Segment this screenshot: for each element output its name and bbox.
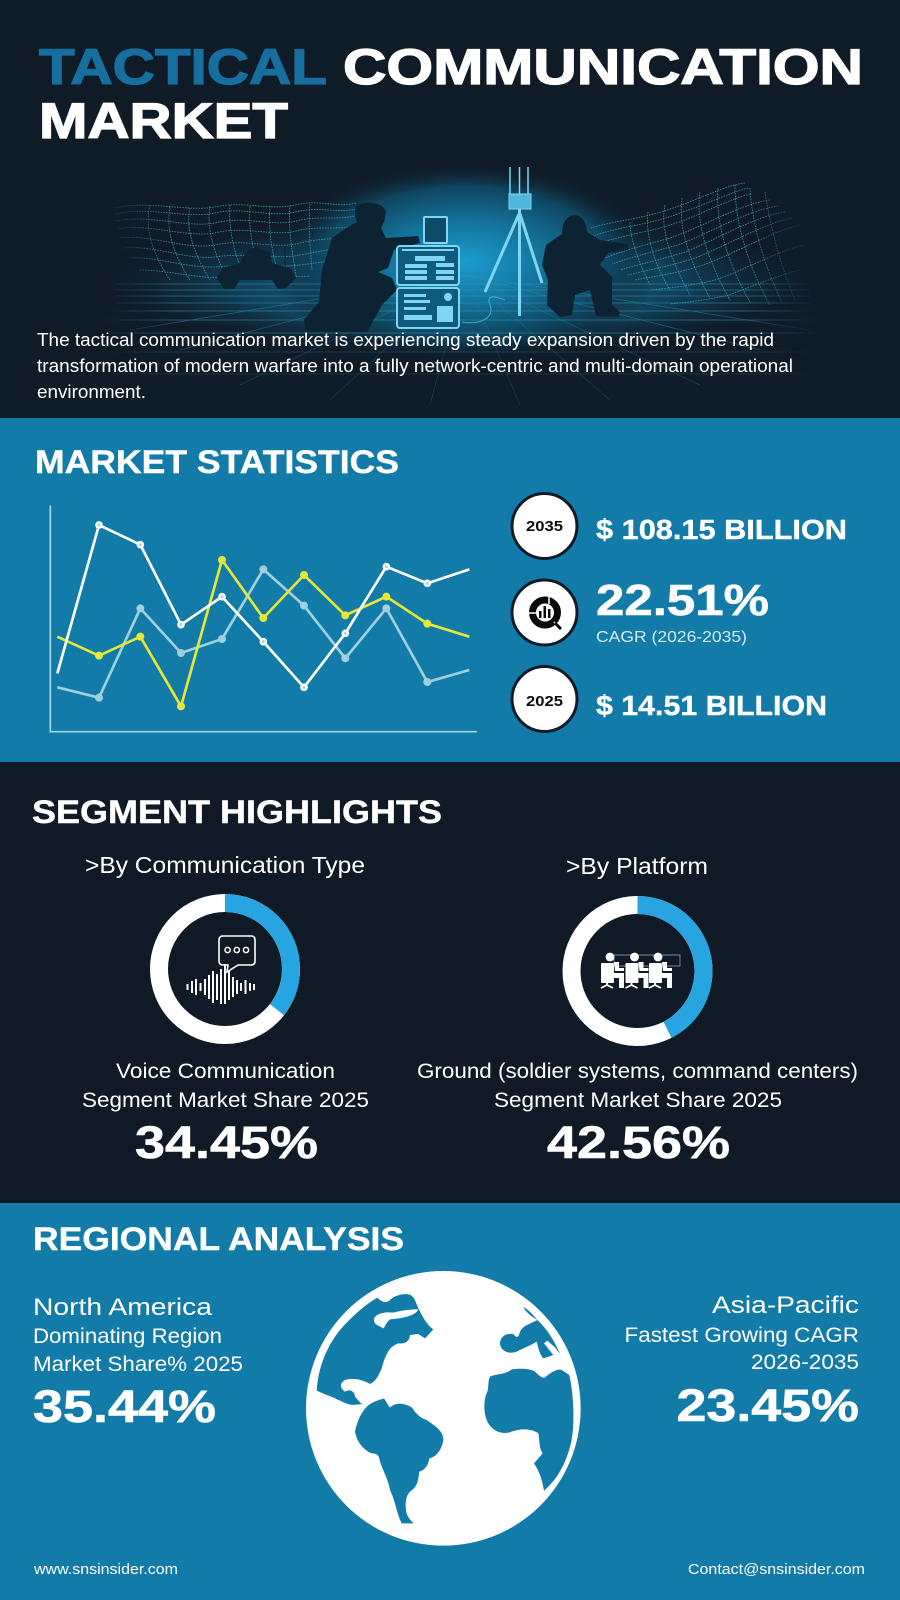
- caption: voice communication share: Segment Market Share 2025: [82, 1089, 369, 1112]
- caption: voice communication share: [82, 1060, 369, 1112]
- badge: 2025: 2025: [526, 693, 563, 710]
- stat: 2035 market value: $ 108.15 BILLION: [596, 514, 847, 545]
- caption: ground platform share: [417, 1060, 858, 1112]
- title: TACTICAL: [39, 39, 327, 95]
- text block: asia-pacific: 23.45%: [676, 1380, 859, 1431]
- label: by platform: >By Platform: [566, 853, 708, 879]
- stat: CAGR value: CAGR (2026-2035): [596, 629, 747, 646]
- text block: north america: 35.44%: [33, 1381, 216, 1432]
- caption: ground platform share: Ground (soldier systems, command centers): [417, 1060, 858, 1083]
- caption: ground platform share: Segment Market Share 2025: [494, 1089, 782, 1112]
- badge: 2035: 2035: [526, 518, 563, 535]
- badge: 2025: [512, 666, 577, 732]
- title: MARKET: [39, 93, 288, 149]
- badge: CAGR icon: [512, 580, 577, 645]
- icon: antenna on tripod: [462, 167, 542, 323]
- heading: segment highlights: SEGMENT HIGHLIGHTS: [32, 794, 442, 830]
- panel: market statistics: [0, 418, 900, 762]
- description text: The tactical communication market is experiencing steady expansion driven by the rapid: [37, 330, 774, 350]
- icon: speech bubble with waveform: [188, 936, 255, 1004]
- series: teal line: [57, 565, 469, 702]
- donut chart: ground platform: [572, 905, 704, 1037]
- description text: [37, 330, 793, 402]
- illustration: soldiers and communications equipment on wireframe terrain: [90, 162, 830, 405]
- text block: asia-pacific: 2026-2035: [751, 1351, 859, 1374]
- series: white line: [57, 522, 469, 690]
- footer: contact: Contact@snsinsider.com: [688, 1561, 865, 1578]
- text block: asia-pacific: Fastest Growing CAGR: [624, 1324, 859, 1347]
- icon: kneeling soldier with rifle: [542, 215, 628, 317]
- icon: kneeling soldier with headset: [304, 203, 420, 332]
- text block: asia-pacific: [624, 1292, 859, 1431]
- title: [39, 39, 863, 149]
- icon: operators at command consoles: [601, 953, 680, 988]
- series: yellow line: [57, 556, 469, 710]
- caption: voice communication share: Voice Communication: [116, 1060, 335, 1083]
- title: COMMUNICATION: [343, 39, 863, 95]
- stat: CAGR value: 22.51%: [596, 576, 769, 625]
- description text: transformation of modern warfare into a fully network-centric and multi-domain operational: [37, 356, 793, 376]
- panel: hero header: [37, 48, 860, 405]
- text block: north america: [33, 1294, 243, 1432]
- text block: north america: Dominating Region: [33, 1325, 222, 1348]
- text block: asia-pacific: Asia-Pacific: [712, 1292, 859, 1319]
- label: by communication type: >By Communication Type: [85, 852, 365, 878]
- sub-panel: by communication type: [82, 852, 369, 1168]
- badge: 2035: [512, 494, 577, 558]
- stat: 42.56%: 42.56%: [547, 1117, 730, 1168]
- stat: 34.45%: 34.45%: [135, 1117, 318, 1168]
- line chart: [50, 505, 477, 732]
- text block: north america: North America: [33, 1294, 213, 1321]
- footer: website: www.snsinsider.com: [33, 1561, 178, 1578]
- description text: environment.: [37, 382, 146, 402]
- stat: CAGR value: [596, 576, 769, 646]
- icon: communication racks and laptop: [397, 217, 459, 328]
- panel: regional analysis: [0, 1203, 900, 1600]
- heading: market statistics: MARKET STATISTICS: [35, 444, 399, 480]
- sub-panel: by platform: [417, 853, 858, 1168]
- icon: armored vehicle: [217, 247, 296, 289]
- panel: segment highlights: [0, 762, 900, 1203]
- heading: regional analysis: REGIONAL ANALYSIS: [33, 1221, 404, 1257]
- text block: north america: Market Share% 2025: [33, 1353, 243, 1376]
- icon: globe: [306, 1271, 581, 1546]
- stat: 2025 market value: $ 14.51 BILLION: [596, 690, 827, 721]
- donut chart: voice communication: [159, 903, 291, 1035]
